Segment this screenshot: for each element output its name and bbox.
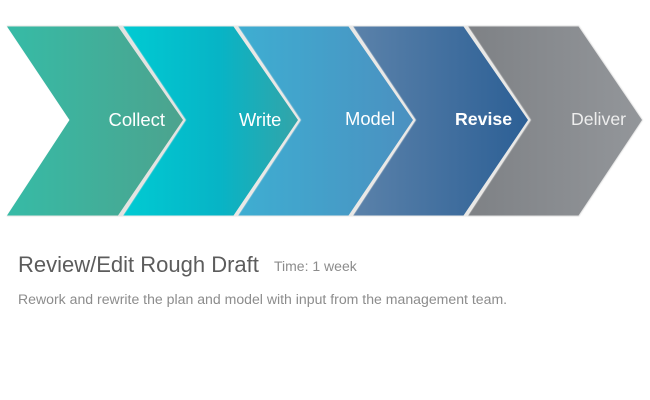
label: Model: Model: [345, 108, 395, 129]
chevron: Write: [122, 26, 301, 216]
label: Revise: Revise: [455, 109, 512, 129]
label: Write: Write: [239, 109, 281, 130]
chevron: Revise: [352, 26, 531, 216]
label: Collect: Collect: [108, 109, 165, 130]
label: Deliver: Deliver: [571, 109, 626, 129]
chevron: Deliver: [467, 26, 643, 216]
time note: Time: 1 week: [274, 258, 357, 274]
chevron: Collect: [6, 26, 186, 216]
heading: Review/Edit Rough Draft: [18, 252, 259, 277]
chevron: Model: [237, 26, 416, 216]
description: Rework and rewrite the plan and model with input from the management team.: [18, 291, 507, 307]
